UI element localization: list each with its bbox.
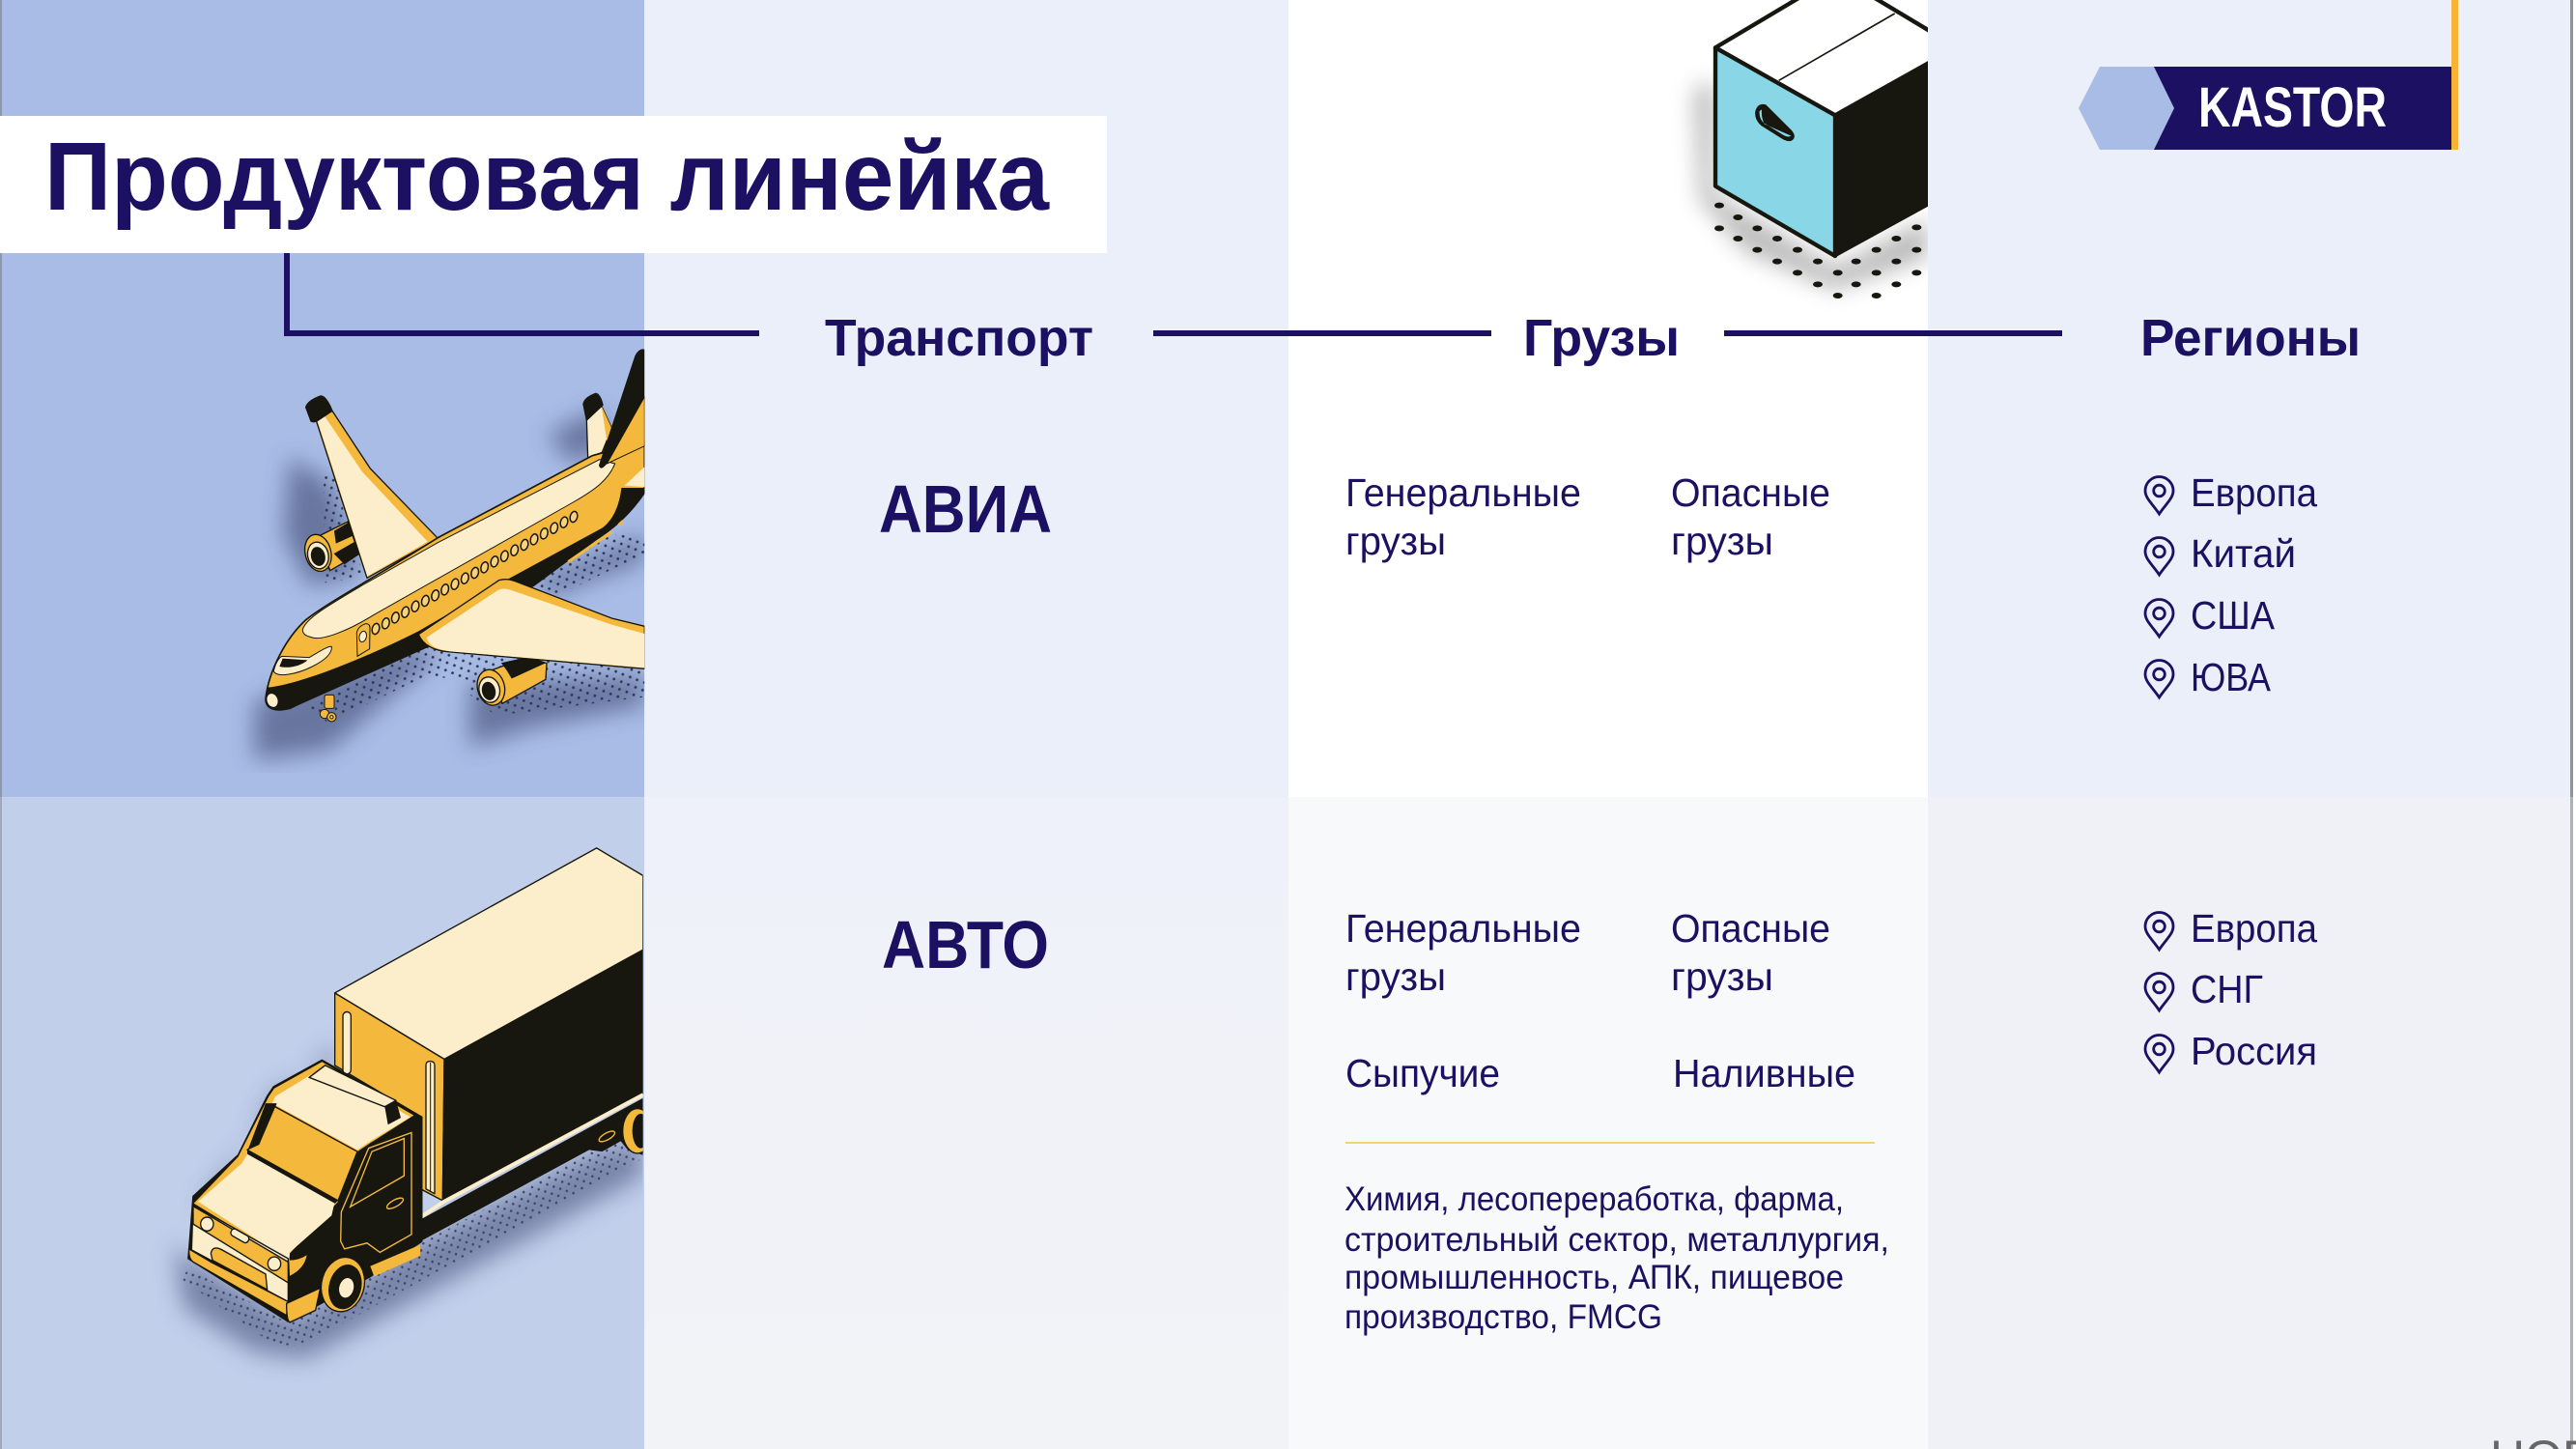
nose gear <box>320 695 336 722</box>
road industries text <box>1345 1180 1889 1336</box>
air regions list: Европа <box>2191 470 2317 515</box>
truck door <box>341 1132 411 1252</box>
air cargo types <box>1345 470 1830 563</box>
cockpit window <box>273 646 331 675</box>
column heading: Регионы: Регионы <box>2140 309 2361 367</box>
row label: АВТО: АВТО <box>882 907 1049 982</box>
icon: truck illustration <box>174 848 652 1358</box>
column heading: Грузы: Грузы <box>1523 309 1680 367</box>
truck front wheel <box>322 1258 365 1312</box>
cabin windows <box>371 511 579 635</box>
truck front <box>189 1205 420 1322</box>
icon: location pin <box>2145 476 2173 514</box>
fuselage top band <box>302 460 615 639</box>
right page edge line <box>2570 0 2576 1449</box>
air cargo types: Генеральные <box>1345 470 1581 515</box>
connector line: Транспорт to Грузы <box>1153 330 1491 336</box>
road cargo types: Опасные <box>1671 906 1830 951</box>
air cargo types: Опасные <box>1671 470 1830 515</box>
icon: location pin <box>2145 974 2173 1010</box>
panel: column backgrounds, bottom row <box>0 797 2576 1449</box>
plane shadows <box>254 409 644 760</box>
title banner: Продуктовая линейка <box>44 123 1050 231</box>
air regions list: Китай <box>2191 531 2296 576</box>
cargo body <box>335 848 643 1201</box>
road cargo types: Наливные <box>1673 1051 1855 1095</box>
plane halftone dots <box>306 473 644 723</box>
road industries text: строительный сектор, металлургия, <box>1345 1221 1889 1259</box>
icon: airplane illustration <box>254 349 644 760</box>
far wing <box>306 396 438 578</box>
road regions list: СНГ <box>2191 967 2263 1011</box>
air regions list: США <box>2191 593 2276 638</box>
far stabilizer <box>583 393 611 458</box>
road industries text: Химия, лесопереработка, фарма, <box>1345 1180 1844 1218</box>
air regions list <box>2145 470 2317 699</box>
row label: АВИА: АВИА <box>879 471 1052 547</box>
air cargo types: грузы <box>1671 519 1773 563</box>
road regions list: Европа <box>2191 906 2317 951</box>
near engine <box>473 657 547 708</box>
road cargo types: грузы <box>1671 954 1773 999</box>
connector line: Грузы to Регионы <box>1724 330 2062 336</box>
icon: location pin <box>2145 661 2173 697</box>
road regions list: Россия <box>2191 1029 2317 1073</box>
truck cab <box>188 1060 422 1321</box>
logo: KASTOR: KASTOR <box>2198 76 2387 139</box>
fuselage <box>266 441 644 710</box>
nose light <box>267 694 278 707</box>
cabin door <box>356 624 370 656</box>
chassis <box>422 1094 652 1240</box>
road cargo types <box>1345 906 1855 1095</box>
truck halftone dots <box>182 1141 643 1346</box>
connector line: title to Транспорт <box>287 253 759 333</box>
air regions list: ЮВА <box>2191 655 2272 699</box>
icon: isometric cargo box <box>1693 0 1932 298</box>
truck shadows <box>174 1044 643 1358</box>
panel: column backgrounds, top row <box>0 0 2576 797</box>
column heading: Транспорт: Транспорт <box>825 309 1093 367</box>
road cargo types: Сыпучие <box>1345 1051 1500 1095</box>
road regions list <box>2145 906 2317 1073</box>
belly light strip <box>568 521 623 562</box>
tail fin <box>599 349 644 487</box>
icon: location pin <box>2145 912 2173 950</box>
logo: KASTOR <box>2079 0 2458 150</box>
road industries text: промышленность, АПК, пищевое <box>1345 1259 1844 1296</box>
far engine <box>301 522 359 574</box>
icon: location pin <box>2145 1036 2173 1072</box>
road cargo types: грузы <box>1345 954 1446 999</box>
air cargo types: грузы <box>1345 519 1446 563</box>
icon: location pin <box>2145 537 2173 575</box>
road cargo types: Генеральные <box>1345 906 1581 951</box>
near wing <box>418 580 644 668</box>
fuselage belly <box>266 488 644 710</box>
icon: location pin <box>2145 599 2173 637</box>
road industries text: производство, FMCG <box>1345 1298 1662 1336</box>
